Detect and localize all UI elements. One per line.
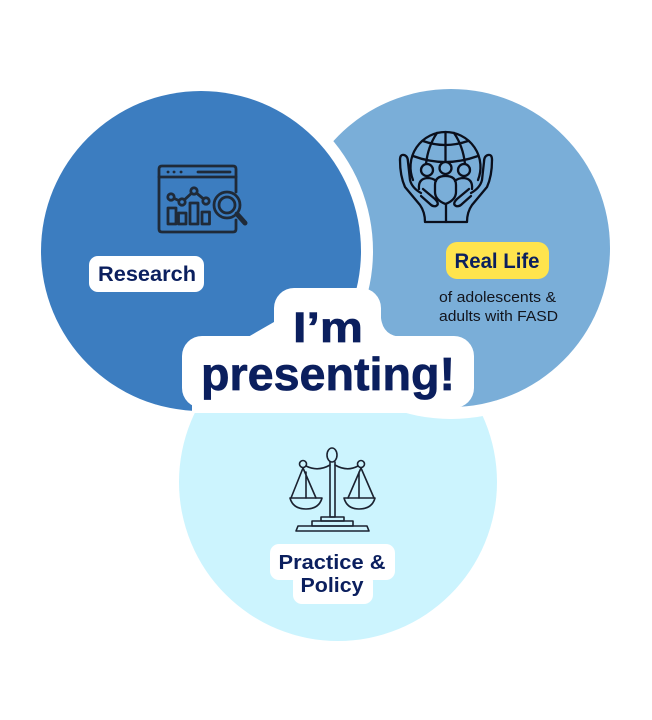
- circle: practice and policy: [179, 413, 497, 641]
- label: research: [89, 256, 204, 292]
- center heading: I’m: [293, 304, 363, 352]
- center label backing: [182, 288, 474, 413]
- circle gap: real life outline: [280, 77, 622, 419]
- icon: balance scales: [290, 448, 375, 531]
- label: practice and policy: Practice &: [278, 552, 386, 574]
- icon: hands holding globe and people: [400, 132, 492, 222]
- center heading: presenting!: [201, 348, 455, 400]
- label: practice and policy: [270, 544, 395, 604]
- circle: real life: [292, 89, 610, 407]
- text: real life description: [439, 289, 558, 325]
- icon: browser chart with magnifier: [159, 166, 245, 232]
- circle: research: [41, 91, 361, 411]
- label: practice and policy: Policy: [300, 575, 364, 597]
- text: real life description: adults with FASD: [439, 308, 558, 325]
- label: real life: Real Life: [454, 250, 540, 273]
- label: research: Research: [98, 263, 196, 286]
- circle gap: research outline: [326, 141, 373, 290]
- text: real life description: of adolescents &: [439, 289, 556, 306]
- center heading: [201, 304, 455, 400]
- label: real life: [446, 242, 549, 279]
